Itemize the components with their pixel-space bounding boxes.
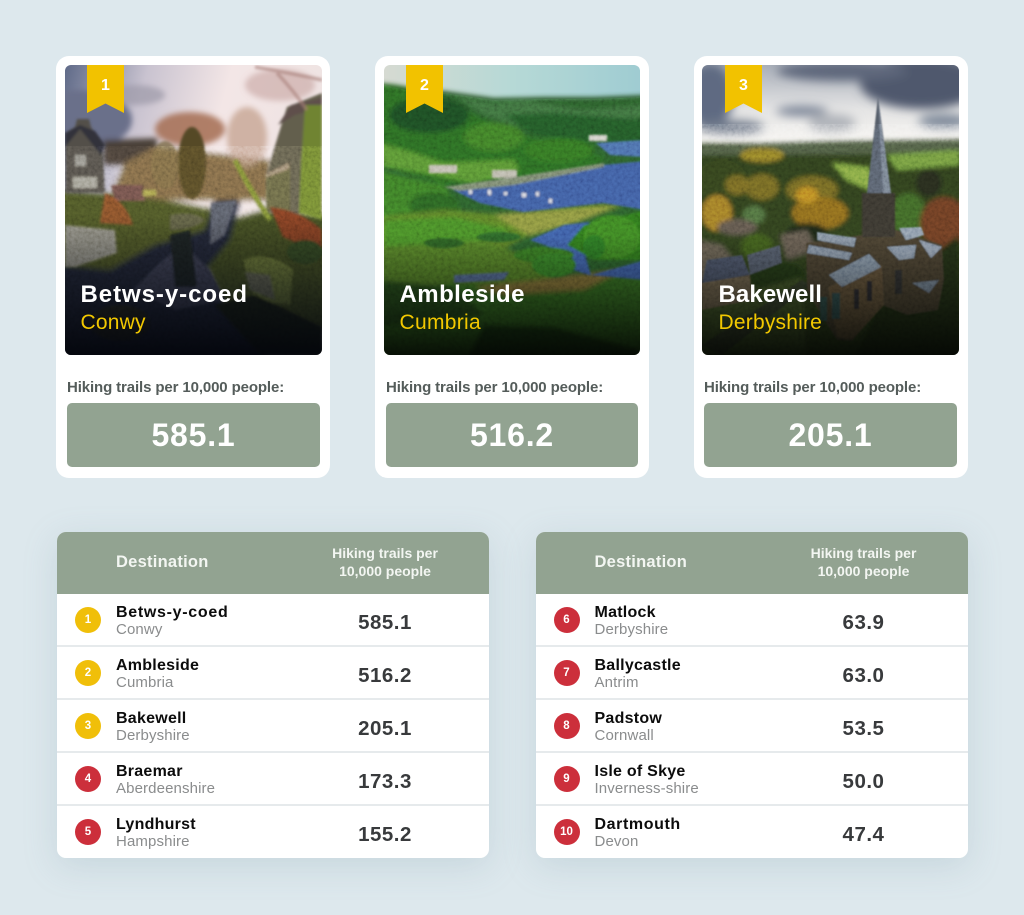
row 2: 2 bbox=[85, 667, 91, 679]
place name: Ambleside bbox=[400, 281, 525, 308]
row 6: Matlock bbox=[594, 604, 656, 621]
row 2: Cumbria bbox=[116, 674, 174, 691]
row 7: 63.0 bbox=[843, 664, 884, 687]
row 4: Braemar bbox=[116, 763, 183, 780]
ribbon badge 3 bbox=[725, 65, 762, 113]
row 5: 155.2 bbox=[358, 823, 412, 846]
row 4: Aberdeenshire bbox=[116, 780, 215, 797]
table header: Hiking trails per bbox=[811, 545, 916, 561]
table: ranks 1 to 5 bbox=[57, 532, 489, 858]
row 1: 1 bbox=[85, 614, 91, 626]
row 4: 4 bbox=[85, 773, 91, 785]
row 6: 63.9 bbox=[843, 611, 884, 634]
metric label: Hiking trails per 10,000 people: bbox=[704, 379, 921, 396]
row 5: Lyndhurst bbox=[116, 816, 196, 833]
row 6: Derbyshire bbox=[594, 621, 668, 638]
table header: Destination bbox=[594, 553, 687, 571]
row 8: 8 bbox=[563, 720, 570, 732]
metric value bbox=[67, 403, 320, 467]
photo: lake at Ambleside bbox=[384, 65, 640, 355]
photo: river at Betws-y-coed bbox=[65, 65, 322, 355]
row 5: 5 bbox=[85, 826, 91, 838]
metric value: 585.1 bbox=[151, 417, 236, 453]
place name: Betws-y-coed bbox=[80, 281, 248, 308]
table header: 10,000 people bbox=[339, 563, 431, 579]
row 1: 585.1 bbox=[358, 611, 412, 634]
row 2: 516.2 bbox=[358, 664, 412, 687]
metric label: Hiking trails per 10,000 people: bbox=[67, 379, 284, 396]
table header bbox=[536, 532, 968, 594]
row 8: Padstow bbox=[594, 710, 662, 727]
row 9 bbox=[536, 753, 968, 806]
row 10: Dartmouth bbox=[594, 816, 681, 833]
row 4: 173.3 bbox=[358, 770, 412, 793]
row 1: Conwy bbox=[116, 621, 162, 638]
row 8 bbox=[536, 700, 968, 753]
row 3: Derbyshire bbox=[116, 727, 190, 744]
place name: Derbyshire bbox=[718, 311, 822, 334]
row 7: 7 bbox=[563, 667, 570, 679]
row 1: Betws-y-coed bbox=[116, 604, 228, 621]
row 10: 10 bbox=[560, 826, 573, 838]
ribbon badge 2: 2 bbox=[420, 77, 429, 94]
row 9: 9 bbox=[563, 773, 570, 785]
place name: Conwy bbox=[80, 311, 146, 334]
place name bbox=[80, 281, 248, 334]
place name: Cumbria bbox=[400, 311, 481, 334]
row 10: Devon bbox=[594, 833, 638, 850]
row 9: 50.0 bbox=[843, 770, 884, 793]
row 3: 3 bbox=[85, 720, 91, 732]
row 7 bbox=[536, 647, 968, 700]
row 10: 47.4 bbox=[843, 823, 884, 846]
row 9: Inverness-shire bbox=[594, 780, 699, 797]
place name bbox=[400, 281, 525, 334]
row 10 bbox=[554, 816, 884, 850]
row 5: Hampshire bbox=[116, 833, 190, 850]
panel: card 1 Betws-y-coed bbox=[56, 56, 330, 478]
ribbon badge 2 bbox=[406, 65, 443, 113]
table header bbox=[57, 532, 489, 594]
metric value bbox=[386, 403, 638, 467]
row 9: Isle of Skye bbox=[594, 763, 686, 780]
ribbon badge 1 bbox=[87, 65, 124, 113]
metric value: 205.1 bbox=[788, 417, 873, 453]
table: ranks 6 to 10 bbox=[536, 532, 968, 858]
row 7: Ballycastle bbox=[594, 657, 681, 674]
row 8: 53.5 bbox=[843, 717, 884, 740]
metric value: 516.2 bbox=[470, 417, 554, 453]
place name bbox=[718, 281, 822, 334]
panel: card 3 Bakewell bbox=[694, 56, 968, 478]
metric value bbox=[704, 403, 957, 467]
place name: Bakewell bbox=[718, 281, 822, 308]
row 6 bbox=[536, 594, 968, 647]
table header: Hiking trails per bbox=[332, 545, 438, 561]
row 5 bbox=[75, 816, 412, 850]
row 3: 205.1 bbox=[358, 717, 412, 740]
row 1 bbox=[57, 594, 489, 647]
row 3: Bakewell bbox=[116, 710, 186, 727]
ribbon badge 1: 1 bbox=[101, 77, 110, 94]
row 3 bbox=[57, 700, 489, 753]
row 2: Ambleside bbox=[116, 657, 199, 674]
table header: Destination bbox=[116, 553, 209, 571]
row 8: Cornwall bbox=[594, 727, 654, 744]
row 6: 6 bbox=[563, 614, 570, 626]
row 4 bbox=[57, 753, 489, 806]
row 2 bbox=[57, 647, 489, 700]
ribbon badge 3: 3 bbox=[739, 77, 748, 94]
row 7: Antrim bbox=[594, 674, 639, 691]
metric label: Hiking trails per 10,000 people: bbox=[386, 379, 603, 396]
table header: 10,000 people bbox=[818, 563, 909, 579]
photo: church at Bakewell bbox=[702, 65, 959, 355]
panel: card 2 Ambleside bbox=[375, 56, 649, 478]
